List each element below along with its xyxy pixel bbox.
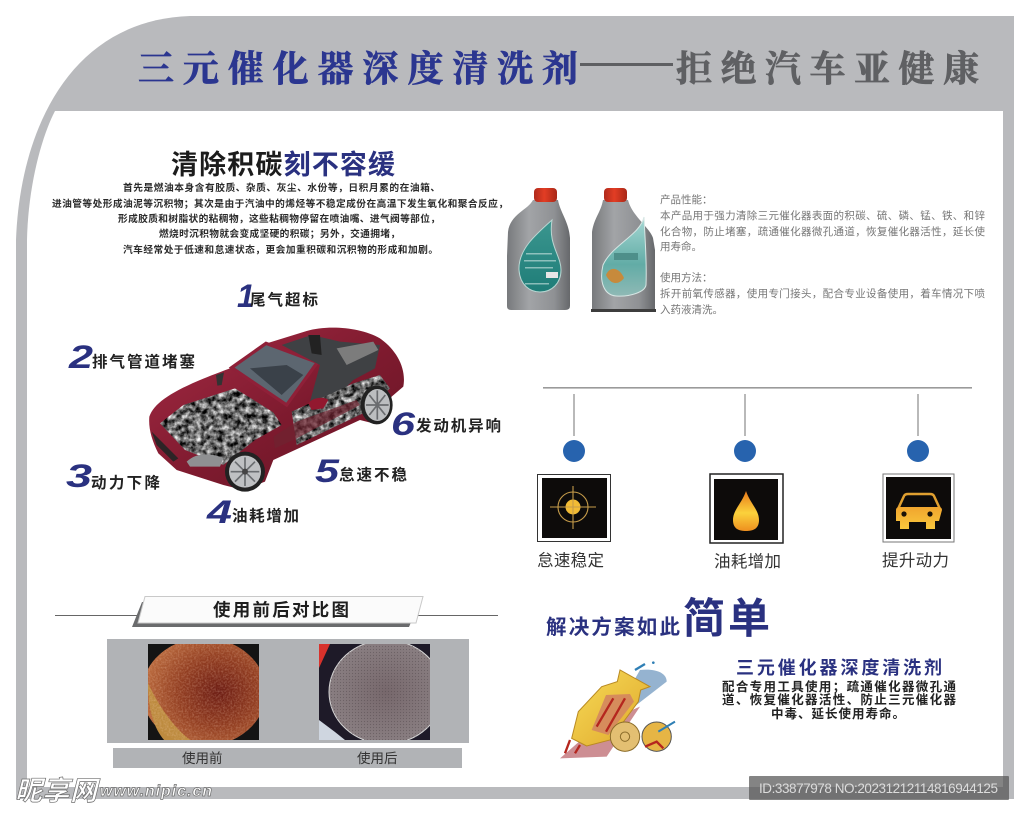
- label 2: [68, 339, 195, 375]
- car cutaway illustration: [149, 328, 404, 492]
- label 1: 尾气超标: [250, 291, 318, 309]
- converter body: [572, 670, 650, 746]
- label 4: [206, 494, 299, 530]
- product description: 使用方法：: [660, 271, 712, 284]
- product bottles: [507, 188, 656, 312]
- body paragraph: 首先是燃油本身含有胶质、杂质、灰尘、水份等，日积月累的在油箱、: [123, 181, 440, 194]
- comparison captions: [113, 748, 462, 768]
- body paragraph: 燃烧时沉积物就会变成坚硬的积碳；另外，交通拥堵，: [159, 227, 400, 240]
- title: [138, 49, 979, 89]
- label 5: 5: [315, 453, 341, 489]
- label 6: 6: [391, 406, 415, 442]
- comparison captions: 使用后: [357, 750, 398, 766]
- product description: 用寿命。: [660, 240, 702, 253]
- solution product name: 三元催化器深度清洗剂: [736, 657, 942, 678]
- product description: 产品性能：: [660, 193, 712, 206]
- solution description: 道、恢复催化器活性、防止三元催化器: [722, 692, 956, 707]
- icon: car power: [883, 474, 954, 542]
- label 4: 油耗增加: [232, 507, 299, 525]
- solution description: 中毒、延长使用寿命。: [771, 706, 905, 721]
- label 2: 2: [68, 339, 93, 375]
- icon: bottle back: [507, 188, 570, 310]
- benefit labels: 怠速稳定: [537, 551, 604, 570]
- rear wheel: [361, 386, 393, 424]
- body paragraph: 进油管等处形成油泥等沉积物；其次是由于汽油中的烯烃等不稳定成份在高温下发生氧化和聚合反应，: [52, 197, 508, 210]
- car body: [149, 328, 404, 490]
- label 1: 1: [237, 278, 255, 314]
- title: 拒绝汽车亚健康: [676, 49, 979, 89]
- symptom labels: [66, 278, 501, 530]
- body paragraph: 形成胶质和树脂状的粘稠物，这些粘稠物停留在喷油嘴、进气阀等部位，: [118, 212, 440, 225]
- comparison heading banner: [55, 596, 498, 627]
- label 1: [237, 278, 318, 314]
- watermark: image id: [749, 776, 1009, 800]
- catalytic converter illustration: [560, 661, 675, 758]
- grille and bumper: [152, 432, 178, 462]
- solution heading: 简单: [683, 595, 770, 642]
- product description: 入药液清洗。: [660, 303, 723, 316]
- solution description: [722, 679, 956, 721]
- label 5: 怠速不稳: [339, 465, 407, 484]
- benefit labels: [537, 551, 949, 571]
- icon: bottle front: [591, 188, 656, 312]
- comparison photo panel: [107, 638, 469, 746]
- watermark: site logo: www.nipic.cn: [100, 783, 212, 800]
- title: 三元催化器深度清洗剂: [138, 49, 578, 89]
- comparison heading banner: 使用前后对比图: [213, 600, 349, 620]
- front wheel: [225, 452, 265, 492]
- label 3: [66, 458, 160, 494]
- label 6: 发动机异响: [416, 416, 501, 435]
- label 4: 4: [206, 494, 232, 530]
- bonnet vent: [216, 372, 224, 386]
- label 5: [315, 453, 407, 489]
- body paragraph: [52, 181, 508, 256]
- white content area: [27, 111, 1003, 787]
- sill strip: [273, 400, 360, 448]
- windshield: [232, 343, 317, 405]
- product description: 本产品用于强力清除三元催化器表面的积碳、硫、磷、锰、铁、和锌: [660, 209, 986, 222]
- benefits connector lines and dots: [543, 387, 972, 462]
- solution description: 配合专用工具使用；疏通催化器微孔通: [722, 679, 956, 694]
- label 3: 3: [66, 458, 92, 494]
- solution heading: 解决方案如此: [546, 615, 680, 639]
- body paragraph: 汽车经常处于低速和怠速状态，更会加重积碳和沉积物的形成和加剧。: [123, 243, 438, 256]
- benefit labels: 提升动力: [882, 551, 949, 570]
- watermark: site logo: 昵享网: [15, 776, 101, 806]
- product description: 化合物，防止堵塞，疏通催化器微孔通道，恢复催化器活性，延长使: [660, 225, 986, 238]
- mirror: [308, 398, 328, 410]
- solution heading: [546, 595, 770, 642]
- door cutaway: [292, 375, 390, 445]
- engine bay: [160, 388, 282, 465]
- section heading: carbon removal: 清除积碳刻不容缓: [171, 149, 395, 180]
- watermark: image id: ID:33877978 NO:20231212114816944125: [759, 781, 998, 796]
- comparison captions: 使用前: [182, 750, 222, 766]
- label 6: [391, 406, 501, 442]
- cabin interior: [282, 335, 380, 402]
- product description: [660, 193, 986, 316]
- photo: before: [148, 644, 259, 740]
- product description: 拆开前氧传感器，使用专门接头，配合专业设备使用，着车情况下喷: [660, 287, 986, 300]
- photo: after: [319, 644, 430, 740]
- detail circle: reaction: [642, 722, 671, 751]
- detail circle: honeycomb: [610, 722, 640, 751]
- label 3: 动力下降: [91, 474, 160, 492]
- label 2: 排气管道堵塞: [92, 352, 195, 371]
- benefit labels: 油耗增加: [714, 552, 781, 571]
- icon: idle target: [538, 474, 610, 542]
- icon: fuel drop: [710, 474, 783, 543]
- watermark: site logo: [15, 776, 212, 806]
